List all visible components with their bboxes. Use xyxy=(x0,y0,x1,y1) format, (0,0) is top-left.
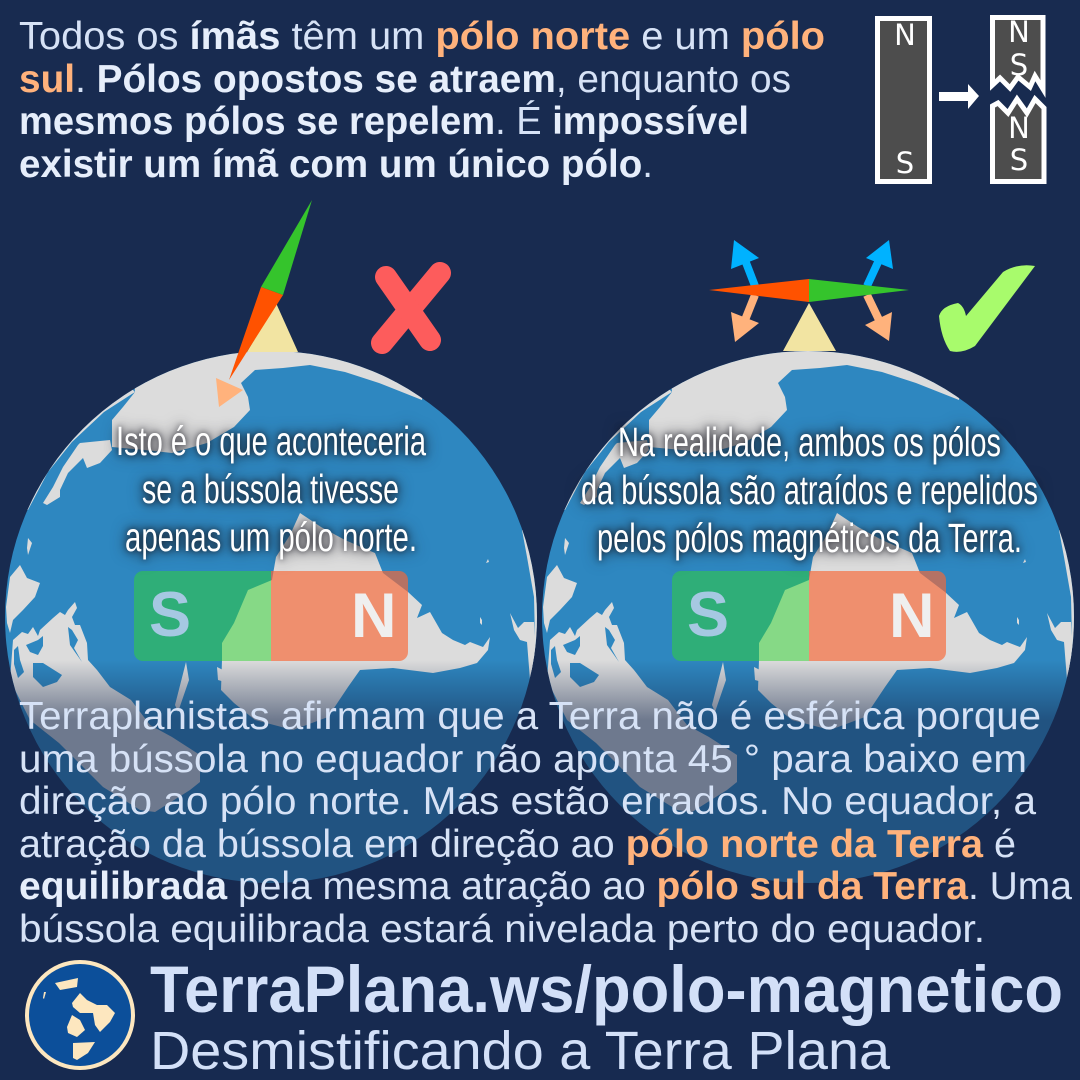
caption: left globe: apenas um pólo norte. xyxy=(125,514,417,560)
explanation text: Terraplanistas afirmam que a Terra não é esférica porque xyxy=(19,695,1041,738)
footer title: TerraPlana.ws/polo-magnetico xyxy=(150,952,1063,1026)
magnet bar: left globe xyxy=(134,571,408,661)
intro text: mesmos pólos se repelem. É impossível xyxy=(19,100,749,143)
caption: left globe: se a bússola tivesse xyxy=(142,466,399,512)
icon: broken magnet: N xyxy=(1008,111,1030,145)
icon: whole magnet: N xyxy=(894,18,916,52)
caption: right globe xyxy=(581,419,1038,561)
explanation text: direção ao pólo norte. Mas estão errados. No equador, a xyxy=(19,780,1036,823)
explanation text: atração da bússola em direção ao pólo norte da Terra é xyxy=(19,823,1016,866)
icon: broken magnet: S xyxy=(1010,143,1028,177)
left globe with magnet xyxy=(5,340,545,883)
blue arrows xyxy=(731,240,893,286)
icon: broken magnet: S xyxy=(1010,48,1028,82)
intro text: existir um ímã com um único pólo. xyxy=(19,143,653,186)
icon: red cross xyxy=(382,273,440,343)
icon: broken magnet: N xyxy=(1008,15,1030,49)
explanation text: equilibrada pela mesma atração ao pólo sul da Terra. Uma xyxy=(19,865,1072,908)
icon: green check mark xyxy=(939,265,1035,352)
logo: flat earth map xyxy=(25,960,135,1070)
intro text xyxy=(19,15,825,186)
explanation text xyxy=(19,695,1072,951)
icon: whole magnet: S xyxy=(896,146,914,180)
icon: whole magnet xyxy=(878,18,930,182)
peach arrows xyxy=(731,295,892,342)
arrow: magnet is cut xyxy=(939,84,979,109)
intro text: Todos os ímãs têm um pólo norte e um pólo xyxy=(19,15,825,58)
left compass with single pole xyxy=(216,200,312,407)
caption: left globe xyxy=(116,418,426,560)
magnet bar: right globe xyxy=(672,571,946,661)
explanation text: bússola equilibrada estará nivelada perto do equador. xyxy=(19,908,985,951)
caption: left globe: Isto é o que aconteceria xyxy=(116,418,426,464)
explanation text: uma bússola no equador não aponta 45 ° para baixo em xyxy=(19,738,1027,781)
dark fade over globes xyxy=(0,660,1080,720)
icon: broken magnet xyxy=(992,15,1044,182)
right globe with magnet xyxy=(542,340,1080,883)
footer subtitle: Desmistificando a Terra Plana xyxy=(150,1021,891,1080)
right compass with force arrows xyxy=(709,240,909,351)
intro text: sul. Pólos opostos se atraem, enquanto os xyxy=(19,58,791,101)
